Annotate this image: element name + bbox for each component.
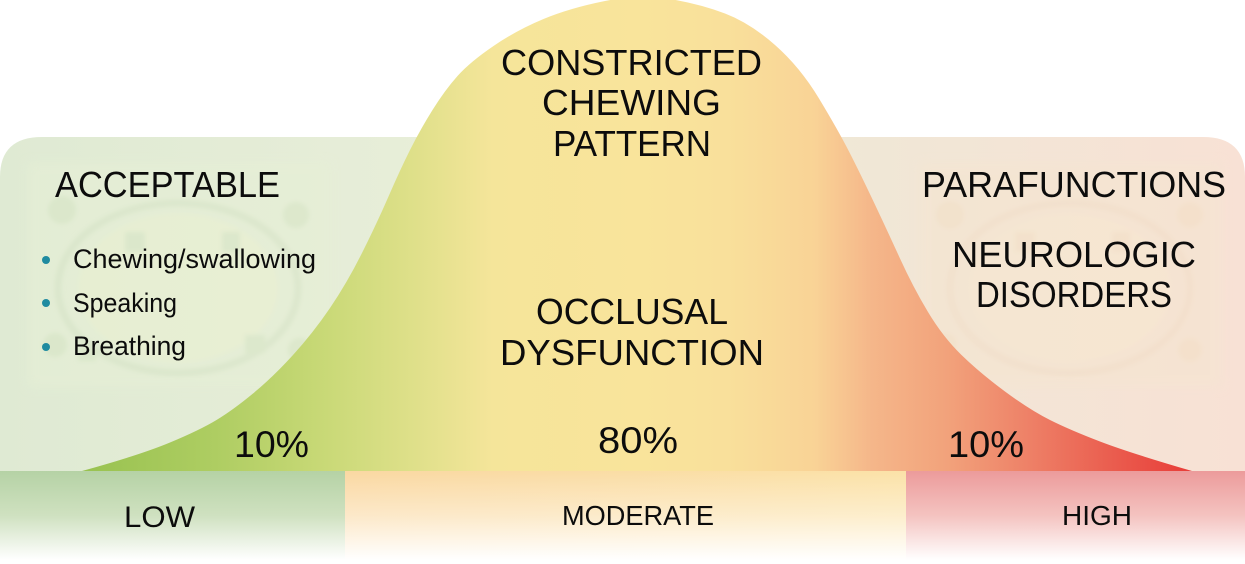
value: high 10%: 10% <box>948 424 1024 465</box>
heading: parafunctions: PARAFUNCTIONS <box>922 164 1226 205</box>
bullet: chewing <box>42 256 50 264</box>
label: moderate: MODERATE <box>562 500 714 531</box>
heading: occlusal dysfunction: OCCLUSAL <box>536 291 728 332</box>
panel: acceptable background <box>0 137 440 471</box>
heading: neurologic disorders <box>952 234 1196 315</box>
heading: acceptable: ACCEPTABLE <box>55 164 280 205</box>
band: low <box>0 471 345 560</box>
heading: constricted chewing pattern: CHEWING <box>542 82 721 123</box>
watermark: left medallion <box>28 163 330 387</box>
heading: occlusal dysfunction: DYSFUNCTION <box>500 332 764 373</box>
list: acceptable functions <box>42 244 316 361</box>
heading: constricted chewing pattern: CONSTRICTED <box>501 42 762 83</box>
heading: neurologic disorders: NEUROLOGIC <box>952 234 1196 275</box>
label: high: HIGH <box>1062 500 1132 531</box>
value: low 10%: 10% <box>234 424 309 465</box>
heading: occlusal dysfunction <box>500 291 764 373</box>
bullet: breathing <box>42 343 50 351</box>
item: chewing: Chewing/swallowing <box>73 244 316 274</box>
heading: constricted chewing pattern <box>501 42 762 164</box>
label: low: LOW <box>124 501 196 534</box>
watermark: right medallion <box>920 163 1222 387</box>
heading: constricted chewing pattern: PATTERN <box>553 123 711 164</box>
item: breathing: Breathing <box>73 331 186 361</box>
bell curve <box>82 0 1192 471</box>
item: speaking: Speaking <box>73 288 177 318</box>
band: moderate <box>345 471 906 560</box>
band: high <box>906 471 1245 560</box>
heading: neurologic disorders: DISORDERS <box>976 274 1172 315</box>
value: moderate 80%: 80% <box>598 420 678 461</box>
bullet: speaking <box>42 299 50 307</box>
panel: parafunctions background <box>820 137 1245 471</box>
